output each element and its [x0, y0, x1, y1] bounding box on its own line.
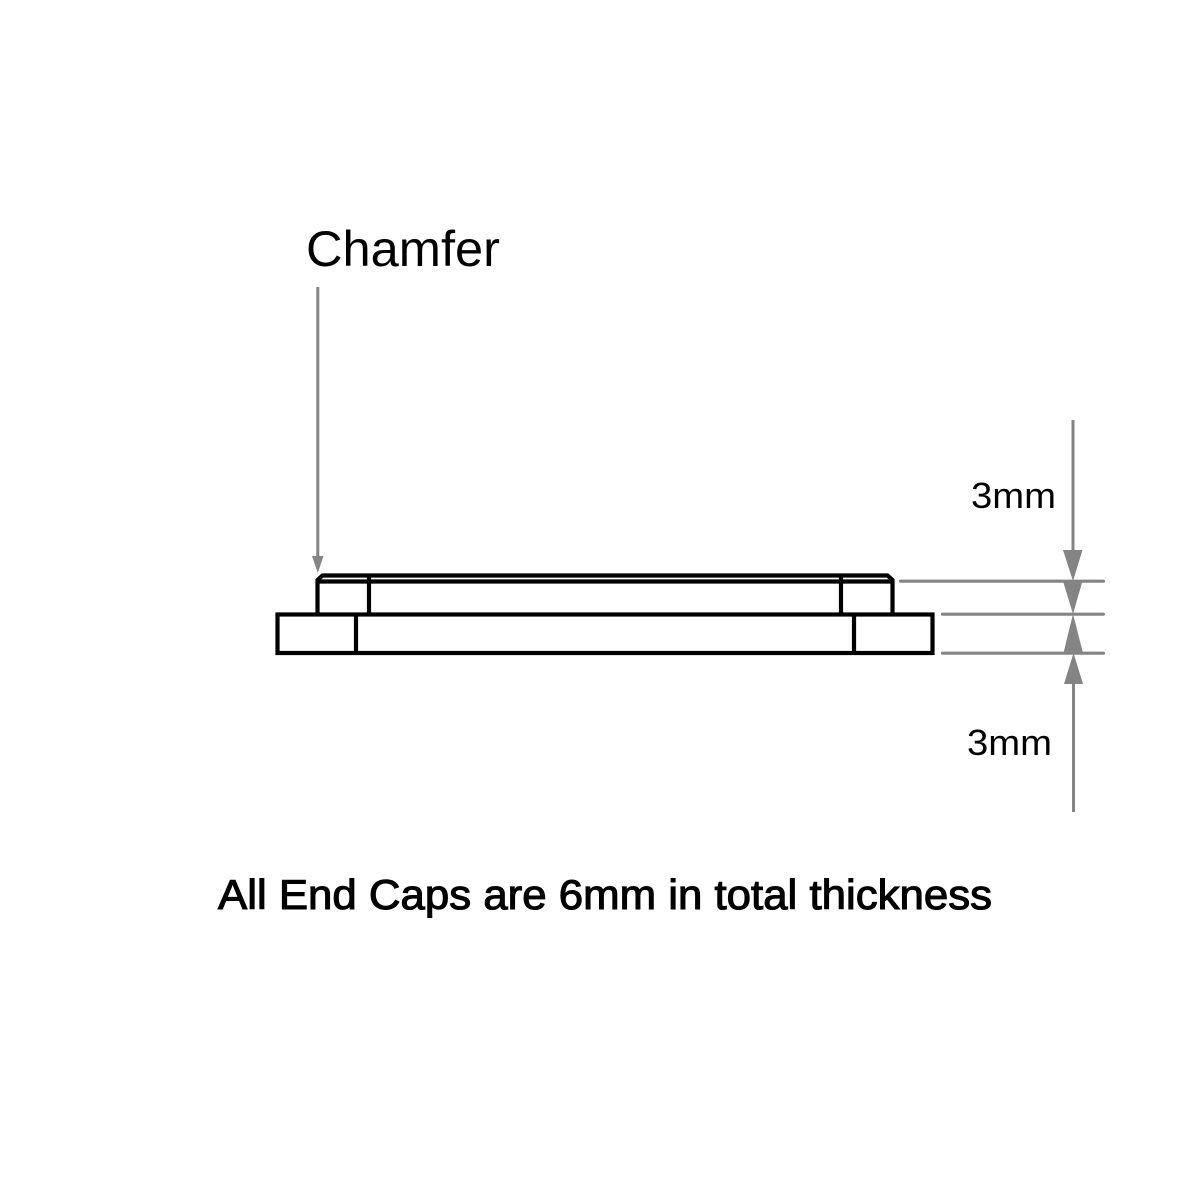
upper step with chamfer	[318, 576, 892, 614]
caption: All End Caps are 6mm in total thickness	[218, 871, 992, 918]
label: lower 3mm: 3mm	[967, 722, 1052, 763]
lower flange	[278, 614, 932, 653]
dimension lines and arrows	[899, 420, 1105, 812]
arrow: chamfer pointer	[312, 287, 324, 573]
arrow: lower 3mm dimension	[1064, 614, 1083, 812]
heading: Chamfer label: Chamfer	[306, 221, 500, 277]
arrow: upper 3mm dimension	[1063, 420, 1082, 614]
end cap profile drawing	[278, 576, 932, 653]
label: upper 3mm: 3mm	[971, 475, 1056, 516]
extension lines	[899, 580, 1105, 655]
